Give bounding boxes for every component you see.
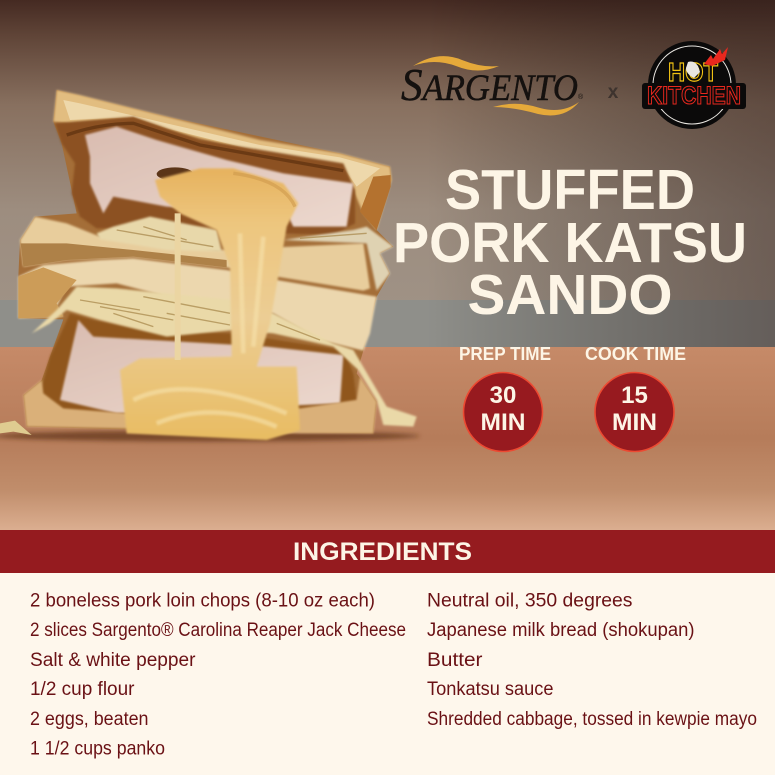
ingredients list: left column: 1/2 cup flour [30,679,135,700]
kitchen word: KITCHEN [647,82,741,110]
top bread slice [53,90,392,230]
lower pork slice [60,320,343,413]
Hot Kitchen logo [642,41,746,129]
fallen cabbage [0,421,32,435]
top crust dark edge [67,123,343,171]
cook time badge [595,372,674,452]
white ring [653,46,731,124]
title [393,158,747,327]
flame [704,47,728,66]
cook time unit: MIN [612,409,657,436]
rooster head [686,62,700,78]
upper cabbage right [283,227,393,291]
registered mark: ® [578,93,584,101]
third bread slice [18,258,377,351]
prep time value: 30 [490,382,516,409]
ingredients banner: INGREDIENTS [293,538,472,566]
photo background: kitchen wall and grey counter [0,0,775,350]
hot word: HOT [668,57,718,87]
top swoosh [413,56,499,70]
ingredients list: right column: Japanese milk bread (shokupan) [427,620,694,641]
ingredients panel background [0,573,775,775]
Sargento logo [401,56,584,116]
wooden cutting board [0,347,775,530]
bottom swoosh [493,102,579,116]
cheese blob shadow [233,173,295,207]
lower katsu crust [40,313,357,417]
ingredients list: left column: 2 eggs, beaten [30,709,148,730]
ingredients list: left column: Salt & white pepper [30,650,196,671]
ingredients list: left column [30,591,406,760]
cabbage shreds [80,227,367,340]
title: PORK KATSU [393,211,747,275]
black badge [648,41,736,129]
sandwich photo illustration [0,90,420,441]
prep time unit: MIN [480,409,526,436]
sandwich silhouette underlay [18,90,393,433]
x separator: x [608,82,619,103]
top bread pale crumb [63,100,380,187]
top bread right crust [360,175,391,230]
upper cabbage left [97,217,222,252]
cheese highlights [133,233,287,427]
title: SANDO [468,263,672,327]
prep time [459,344,551,452]
ingredients list: right column: Butter [427,650,483,671]
wordmark: SARGENTO [401,59,578,110]
melted cheese pull [120,168,300,440]
ingredients list: right column: Neutral oil, 350 degrees [427,591,632,612]
top pork slice [85,127,353,227]
ingredients list: left column: 2 slices Sargento® Carolina Reaper Jack Cheese [30,620,406,641]
second bread slice [20,217,370,291]
thin cheese string [175,213,181,360]
prep time badge [464,372,542,452]
ingredients list: left column: 1 1/2 cups panko [30,739,165,760]
ingredients list: right column [427,591,757,730]
prep time label: PREP TIME [459,344,551,364]
ingredients banner [0,530,775,573]
title: STUFFED [445,158,695,222]
ingredients list: right column: Tonkatsu sauce [427,679,554,700]
cook time value: 15 [621,382,648,409]
bottom bread slice [23,377,377,433]
top katsu crust [55,117,355,235]
ingredients list: left column: 2 boneless pork loin chops (8-10 oz each) [30,591,375,612]
shadow under sandwich [0,431,420,441]
kitchen banner [642,83,746,109]
third bread left crust [18,267,77,318]
lower cabbage [32,287,417,427]
second bread shaded crust [21,243,227,267]
hole in pork [157,167,193,181]
cook time label: COOK TIME [585,344,686,364]
cook time [585,344,686,452]
